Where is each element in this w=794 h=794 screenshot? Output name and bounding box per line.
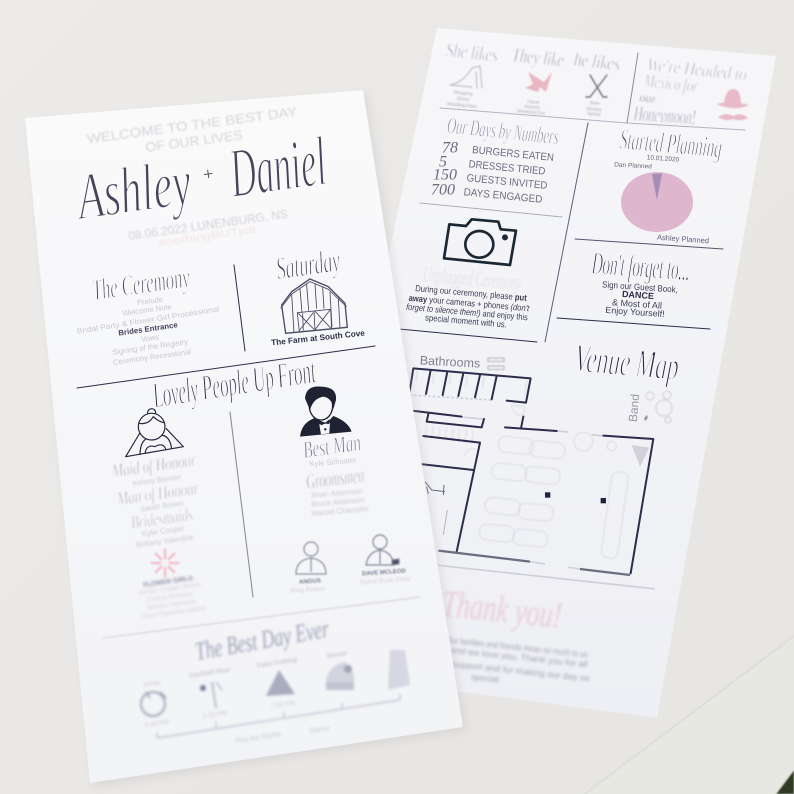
text: unplugged paragraph: During our ceremony, please put xyxy=(415,283,527,303)
pie label: dan: Dan Planned xyxy=(614,162,652,170)
text: he likes list: Sports xyxy=(587,111,602,117)
heading: honeymoon: Mexico for xyxy=(642,71,699,97)
divider: ceremony and venue xyxy=(234,265,245,351)
heading: the ceremony: The Ceremony xyxy=(90,261,192,307)
text: reminders: Enjoy Yourself! xyxy=(605,305,665,319)
panel: front of program (left card): Lovely People Up Front xyxy=(149,350,319,416)
text: order of ceremony: Bridal Party & Flower Girl Processional xyxy=(76,304,220,336)
section: thank you xyxy=(440,583,590,685)
stat labels: GUESTS INVITED xyxy=(466,172,548,192)
heading: unplugged ceremony: Unplugged Ceremony xyxy=(422,261,522,295)
text: below timeline: Dance xyxy=(309,725,331,735)
text: groomsmen: Groomsmen xyxy=(305,462,365,494)
icon: high heel xyxy=(450,66,482,88)
heading: honeymoon: our xyxy=(639,90,657,106)
stat numbers: 78 xyxy=(442,140,458,156)
background: table ledge xyxy=(585,636,794,794)
text: flower girls: Claire Charlotte Adams xyxy=(139,605,207,621)
text: bridesmaids: Bridesmaids xyxy=(130,504,194,534)
heading: they like: They like xyxy=(511,44,565,72)
text: she likes list xyxy=(447,90,478,109)
section: ceremony xyxy=(76,261,220,367)
heading: thank you: Thank you! xyxy=(440,583,564,637)
text: unplugged paragraph: away your cameras + phones (don't xyxy=(408,293,530,313)
section: bride's side xyxy=(110,409,207,621)
heading: saturday: Saturday xyxy=(274,242,343,286)
heading: our days by numbers: Our Days by Numbers xyxy=(446,113,560,149)
text: maid of honour xyxy=(110,450,197,488)
text: he likes list: Beer xyxy=(590,100,601,106)
text: unplugged paragraph: forget to silence them!) and enjoy this xyxy=(406,302,529,322)
labels below icons xyxy=(144,700,296,729)
text: man of honour xyxy=(115,478,200,513)
stat labels xyxy=(463,144,554,206)
heading: the best day ever: The Best Day Ever xyxy=(193,614,332,666)
title: couple names: Daniel xyxy=(225,123,331,213)
text: date and location: 08.06.2022 LUNENBURG, NS xyxy=(127,207,289,243)
date: 10.01.2020 xyxy=(647,154,680,164)
text: groomsmen: Marcel Champlin xyxy=(311,504,369,518)
icon: usher one xyxy=(296,542,326,574)
title: couple names xyxy=(70,123,331,234)
floor plan: sketch details xyxy=(425,445,649,535)
text: usher two xyxy=(359,568,411,586)
section: groom's side xyxy=(290,386,411,595)
text: flower girls: Emma Schuster xyxy=(148,590,195,604)
floor plan: pale gray walls xyxy=(409,395,665,590)
text: thank-you paragraph xyxy=(446,635,590,685)
text: bridesmaids xyxy=(130,504,194,550)
icon: airplane xyxy=(525,72,552,92)
icon: hockey sticks xyxy=(586,75,607,97)
icon: cake xyxy=(266,670,295,696)
icon: usher two xyxy=(366,535,399,565)
heading: honeymoon xyxy=(633,54,748,130)
title: couple names: Ashley xyxy=(70,146,196,234)
heading: venue map: Venue Map xyxy=(573,335,681,389)
text: she likes list: Wedding Days xyxy=(447,101,478,109)
text: thank-you paragraph: special. xyxy=(471,671,501,685)
stat labels: BURGERS EATEN xyxy=(472,144,554,164)
text: they like list xyxy=(517,99,546,116)
text: order of ceremony xyxy=(76,295,220,367)
heading: welcome: WELCOME TO THE BEST DAY xyxy=(86,104,298,146)
text: flower girls: Ashlyn Cooper Brown xyxy=(138,581,202,597)
text: order of ceremony: Brides Entrance xyxy=(118,320,179,338)
floor plan: walls xyxy=(409,368,653,573)
icon: sombrero and moustache xyxy=(716,89,749,120)
divider: under ceremony section xyxy=(77,346,375,388)
labels below icons: 5:30 PM xyxy=(202,710,228,720)
text: man of honour: Sarah Brown xyxy=(140,499,184,513)
panel: front of program (left card) xyxy=(25,90,463,783)
stat numbers: 150 xyxy=(433,166,457,184)
floor plan: soft furniture xyxy=(416,370,629,559)
stat labels: DRESSES TRIED xyxy=(468,158,546,178)
section: started planning xyxy=(614,124,723,245)
labels above timeline: Cake Cutting xyxy=(257,656,297,670)
labels above timeline: Cocktail Hour xyxy=(189,666,232,680)
dividers on back card xyxy=(399,53,745,342)
labels below icons: 5:00 PM xyxy=(144,719,170,729)
section: likes row xyxy=(445,39,749,130)
icon: camera xyxy=(444,219,516,265)
stat labels: DAYS ENGAGED xyxy=(463,186,543,206)
text: thank-you paragraph: support and for making our day so xyxy=(452,659,590,683)
text: he likes list xyxy=(586,100,603,117)
text: they like list: Weekend Out xyxy=(517,108,546,116)
text: usher one xyxy=(290,578,326,595)
text: usher two: Guest Book Crew xyxy=(359,576,411,586)
section: venue map xyxy=(409,335,681,590)
heading: honeymoon: Honeymoon! xyxy=(633,100,697,130)
icon: restroom symbols xyxy=(488,358,504,370)
text: bridesmaids: Kylie Cooper xyxy=(141,523,185,538)
text: best man: Kyle Schuster xyxy=(309,455,357,469)
text: venue name: The Farm at South Cove xyxy=(271,329,366,347)
text: usher one: Ring Bearer xyxy=(290,585,326,595)
text: unplugged paragraph xyxy=(406,283,530,330)
text: reminders: Sign our Guest Book, xyxy=(602,279,678,295)
panel: back of program (right card) xyxy=(300,28,776,718)
label: bathrooms: Bathrooms xyxy=(419,353,481,371)
pie label: ashley: Ashley Planned xyxy=(657,233,709,245)
text: unplugged paragraph: special moment with us. xyxy=(425,312,507,330)
text: man of honour: Man of Honour xyxy=(115,478,200,510)
divider: wedding party xyxy=(230,412,253,597)
text: maid of honour: Maid of Honour xyxy=(110,450,197,482)
section: unplugged ceremony xyxy=(406,219,530,330)
section: the best day ever timeline xyxy=(141,614,410,745)
text: flower girls xyxy=(138,575,207,621)
text: best man xyxy=(301,430,363,469)
text: maid of honour: Kelsey Bander xyxy=(132,472,182,488)
labels above timeline: Arrive xyxy=(143,679,161,689)
text: bridesmaids: Brittany Valentine xyxy=(136,532,194,550)
text: order of ceremony: Welcome Note xyxy=(122,302,172,318)
text: order of ceremony: Signing of the Registry xyxy=(112,337,189,357)
labels above timeline: Dinner xyxy=(326,650,348,660)
text: reminders xyxy=(602,279,678,319)
text: groomsmen: Brian Adamson xyxy=(311,486,363,500)
timeline line xyxy=(157,694,400,738)
text: groomsmen: Bruce Adamson xyxy=(311,495,365,509)
icon: groom xyxy=(300,386,352,437)
icon: couple xyxy=(141,692,166,716)
text: best man: Best Man xyxy=(301,430,363,464)
icon: bride xyxy=(126,409,183,457)
text: thank-you paragraph: Our families and friends mean so much to us xyxy=(446,635,588,659)
floor plan: bottom wall xyxy=(438,551,630,575)
floor plan: pillars xyxy=(545,492,606,503)
text: order of ceremony: Vows xyxy=(140,332,160,344)
heading: welcome xyxy=(86,104,298,155)
stat numbers: 5 xyxy=(439,154,447,170)
text: she likes list: Shoes xyxy=(456,96,470,102)
text: he likes list: Hockey xyxy=(586,106,603,112)
text: reminders: DANCE xyxy=(622,289,654,301)
icon: flower xyxy=(152,550,178,576)
section: saturday venue xyxy=(271,242,366,347)
stat numbers: 700 xyxy=(431,182,455,198)
icon: cocktail xyxy=(200,682,222,708)
label: band: Band xyxy=(626,393,642,423)
text: below timeline xyxy=(235,725,331,745)
icon: barn xyxy=(281,279,347,333)
text: they like list: Travel xyxy=(527,99,539,105)
heading: honeymoon: We're Headed to xyxy=(646,54,748,86)
chart: floor plan xyxy=(409,368,665,590)
text: flower girls: Brooke Valentine xyxy=(147,598,197,612)
header block xyxy=(70,104,331,249)
text: reminders: & Most of All xyxy=(612,297,662,311)
icon: dancing couple xyxy=(388,650,410,690)
divider: above timeline xyxy=(103,597,420,638)
stat numbers xyxy=(431,140,458,198)
heading: he likes: he likes xyxy=(573,49,621,75)
text: groomsmen xyxy=(305,462,369,518)
section: don't forget xyxy=(590,245,691,319)
icon: dinner xyxy=(326,662,354,690)
text: hashtag: #nothingBUTjoll xyxy=(158,225,256,249)
text: order of ceremony: Ceremony Recessional xyxy=(112,347,192,367)
heading: she likes: She likes xyxy=(445,39,499,67)
text: she likes list: Shopping xyxy=(453,90,473,96)
text: they like list: Airports xyxy=(524,104,541,110)
icon: drum kit xyxy=(645,391,672,423)
text: thank-you paragraph: and we love you. Thank you for all xyxy=(450,645,588,669)
labels above timeline xyxy=(143,650,348,689)
section: our days by numbers xyxy=(431,113,560,206)
pie chart xyxy=(621,172,693,232)
labels below icons: 7:00 PM xyxy=(270,700,296,710)
text: flower girls: FLOWER GIRLS xyxy=(143,575,194,589)
text: usher two: DAVE MCLEOD xyxy=(362,568,407,578)
text: order of ceremony: Prelude xyxy=(136,295,164,307)
title: couple names: + xyxy=(201,163,215,185)
shadow of front card xyxy=(29,94,467,787)
text: below timeline: Play the Game xyxy=(235,731,282,745)
text: usher one: ANGUS xyxy=(299,578,321,586)
heading: welcome: OF OUR LIVES xyxy=(144,127,244,155)
